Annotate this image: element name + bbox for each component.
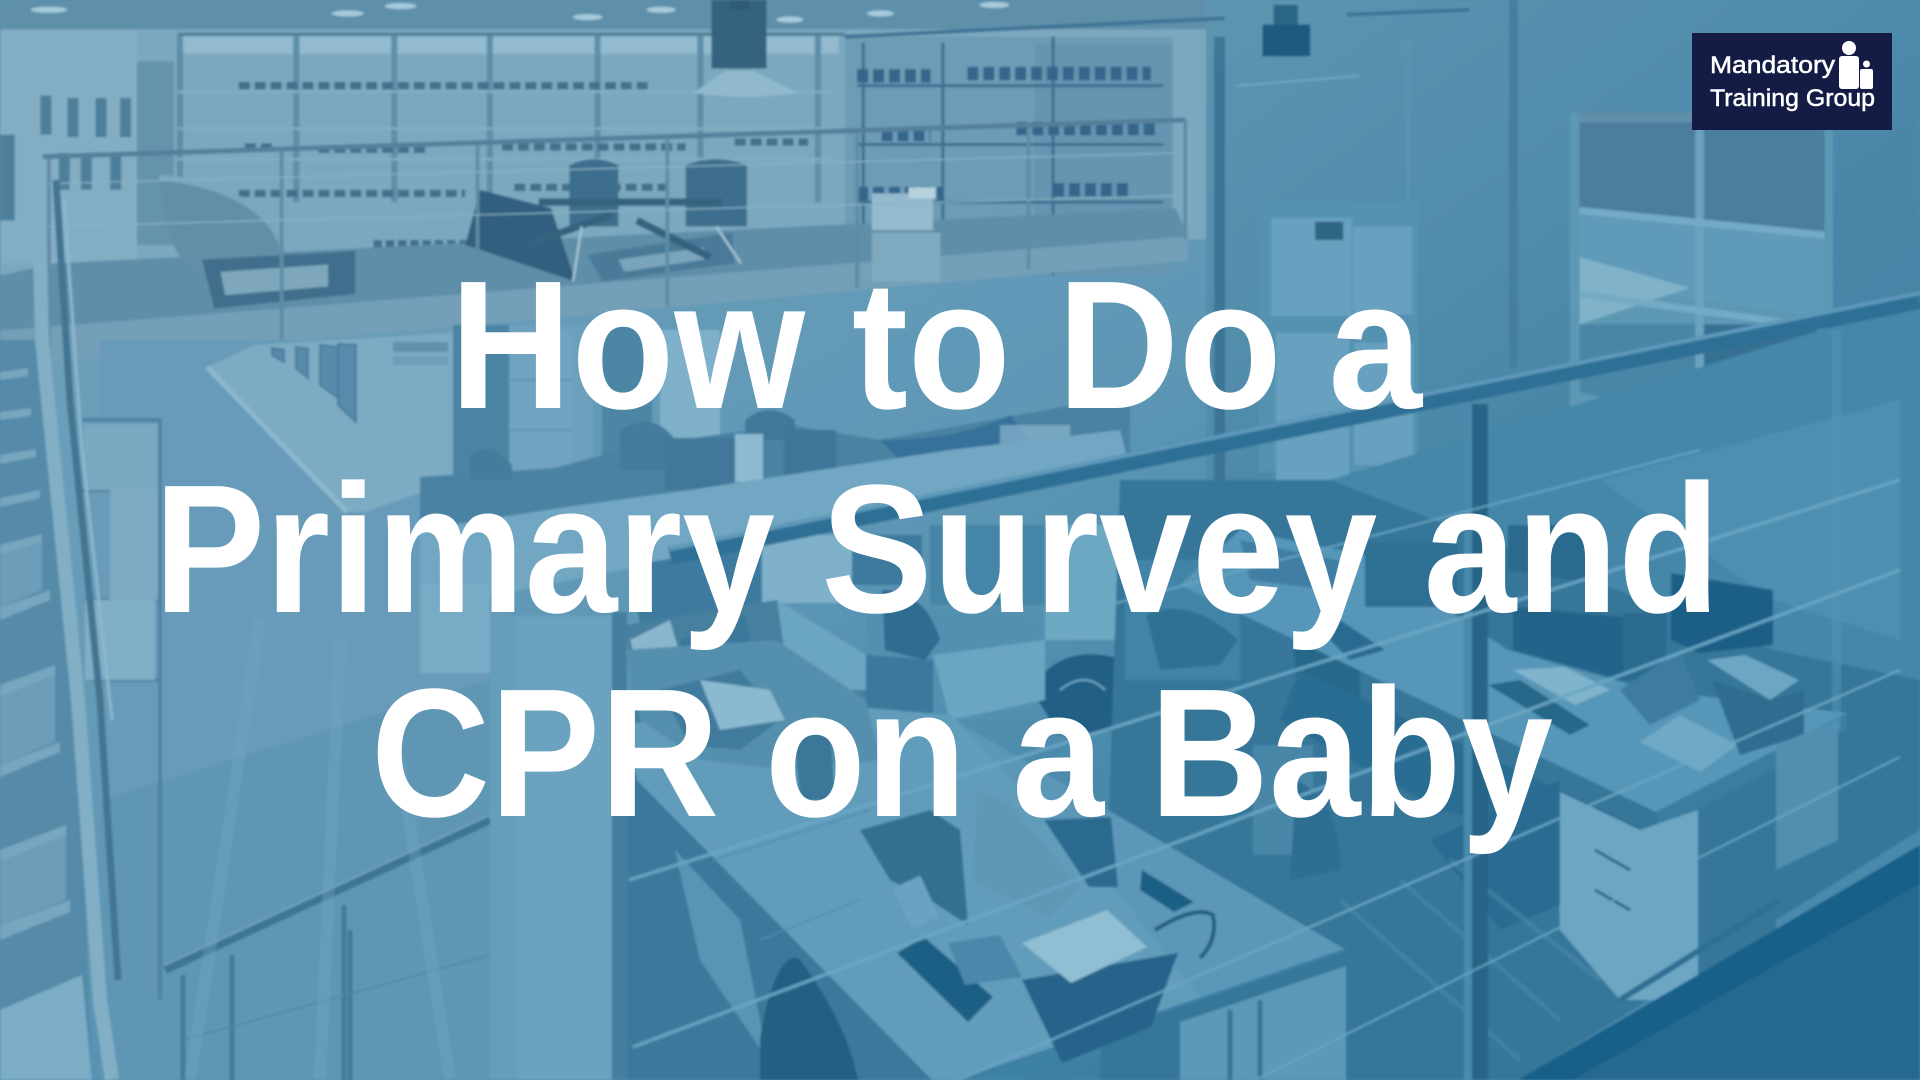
monitors on the desk: [1240, 525, 1773, 680]
spotlight: [693, 0, 798, 97]
right wing lighter area: [955, 720, 1346, 998]
stair handrail: [165, 815, 490, 1080]
right windows: [1570, 113, 1833, 468]
chairs left: [1125, 560, 1360, 855]
balustrade posts: [1464, 330, 1841, 1080]
printer: [872, 187, 940, 282]
headset and cable: [1155, 912, 1214, 958]
lower level of the office, left side: [0, 160, 620, 1080]
wood planks: [1340, 860, 1600, 1060]
logo wordmark: [1710, 52, 1875, 112]
pedestal front: [1556, 720, 1838, 1000]
keyboard and laptop: [1330, 620, 1610, 735]
tub chair: [159, 178, 279, 294]
title line 1: How to Do a: [450, 242, 1423, 447]
desk edge: [960, 950, 1346, 1080]
cabinets and door: [453, 325, 720, 485]
white paper stack: [1022, 910, 1147, 983]
left display boards: [0, 31, 174, 263]
partition panel: [675, 850, 768, 1060]
title line 2: Primary Survey and: [154, 446, 1720, 651]
low table 2: [588, 233, 735, 282]
title line 3: CPR on a Baby: [371, 650, 1553, 855]
desk end below: [1180, 966, 1346, 1080]
storage shelves under stairs: [80, 420, 160, 1000]
phone on desk: [795, 730, 835, 800]
desk lower shadow: [1280, 670, 1660, 860]
right desk end and panel: [1656, 713, 1847, 830]
shoe shelves: [178, 34, 845, 276]
framed pictures: [272, 344, 356, 422]
wall sign: [393, 342, 448, 365]
upper level back wall: [0, 29, 1206, 318]
chairs and floor: [866, 590, 1125, 750]
right boot racks: [845, 37, 1173, 282]
desk surface behind main rail: [420, 430, 1130, 610]
plant: [1651, 422, 1712, 490]
right wall: [1206, 0, 1920, 514]
dark workstation screens back row: [420, 395, 1130, 545]
exit doors: [1259, 202, 1418, 492]
desk clutter: [860, 810, 968, 925]
logo panel: [1692, 33, 1892, 130]
front desk: [625, 640, 1346, 1080]
logo wordmark: Mandatory: [1710, 52, 1835, 79]
lower wall: [207, 332, 465, 512]
vertical pipes: [1220, 0, 1513, 490]
glass balustrade wires: [629, 450, 1900, 1080]
main handrail: [670, 293, 1920, 556]
keyboard: [897, 937, 993, 1022]
logo wordmark: Training Group: [1710, 85, 1875, 112]
spotlight right: [1237, 5, 1359, 86]
title: [154, 242, 1720, 855]
small keyboard right: [1140, 870, 1194, 912]
clutter behind papers: [625, 640, 880, 770]
lower floor wood: [100, 340, 510, 1080]
low table: [202, 251, 355, 309]
upper floor: [0, 208, 1188, 333]
low shelves and clutter: [626, 600, 866, 770]
dark box tray: [1022, 953, 1178, 1063]
floor chair shadow: [1430, 780, 1560, 930]
floor front edge: [0, 236, 1188, 367]
monitors and paper: [665, 415, 1070, 490]
stair balustrade: [38, 160, 118, 1080]
office chair: [760, 958, 858, 1080]
carpet: [1573, 884, 1920, 1080]
desk surface: [625, 700, 1346, 1080]
icon: adult and child figures: [1839, 41, 1873, 89]
boxes and papers: [1620, 650, 1804, 772]
lower office right side: [1100, 300, 1920, 1080]
ceiling track right: [845, 10, 1469, 37]
logo: [1692, 33, 1892, 130]
grey paper tray: [948, 935, 1022, 985]
radiator and wall section: [1600, 400, 1900, 640]
stairs: [0, 340, 92, 1080]
under-desk pedestals: [420, 525, 1120, 673]
wall skirting: [207, 367, 347, 512]
floor and wall behind right desks: [1100, 480, 1920, 1080]
ceiling and lights: [0, 0, 1920, 29]
carpet edge: [1518, 845, 1920, 1080]
monitors back to back: [973, 790, 1080, 917]
meeting table and chairs: [465, 159, 747, 282]
lower floor shading: [100, 640, 620, 1080]
floor boards: [190, 620, 450, 1080]
lower office middle: desks and monitors: [420, 325, 1130, 770]
long desk surface: [1180, 530, 1847, 812]
glass balustrade rail: [43, 120, 1185, 355]
dark chairs left of desk: [627, 760, 940, 1080]
column: [490, 612, 627, 1080]
